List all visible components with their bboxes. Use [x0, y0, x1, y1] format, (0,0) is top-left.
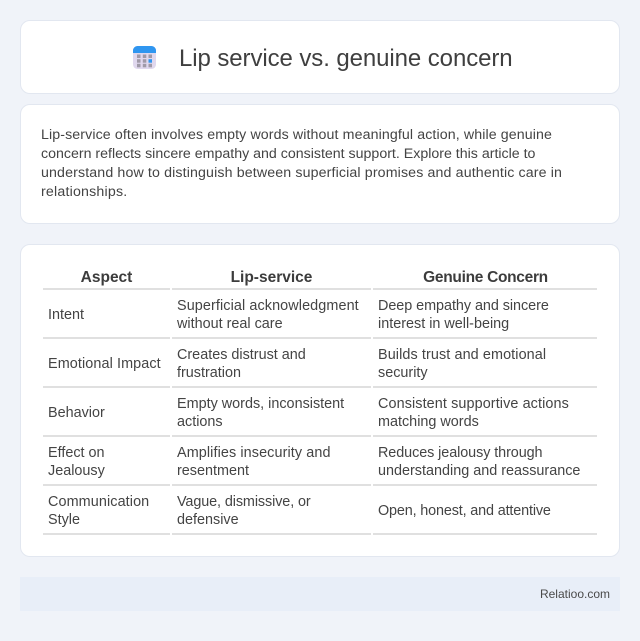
row: Intent [48, 298, 549, 332]
footer credit: Relatioo.com [540, 587, 610, 601]
intro text: Lip-service often involves empty words without meaningful action, while genuine [41, 127, 552, 143]
row: Effect on Jealousy: Amplifies insecurity and [177, 445, 331, 461]
row: Effect on Jealousy: understanding and reassurance [378, 463, 580, 479]
row: Effect on Jealousy: Jealousy [48, 463, 105, 479]
icon: calendar [133, 46, 156, 69]
intro text: relationships. [41, 184, 127, 200]
row: Intent: interest in well-being [378, 316, 509, 332]
intro text: concern reflects sincere empathy and consistent support. Explore this article to [41, 146, 535, 162]
row: Emotional Impact: Emotional Impact [48, 356, 161, 372]
row: Emotional Impact: Builds trust and emotional [378, 347, 546, 363]
row: Communication Style: Vague, dismissive, or [177, 494, 311, 510]
panel: introduction [20, 104, 620, 224]
row: Effect on Jealousy: resentment [177, 463, 249, 479]
row: Effect on Jealousy: Reduces jealousy through [378, 445, 542, 461]
row: Communication Style [48, 494, 551, 528]
row: Intent: Deep empathy and sincere [378, 298, 549, 314]
comparison table [43, 269, 597, 535]
row: Behavior: actions [177, 414, 223, 430]
row: Effect on Jealousy: Effect on [48, 445, 105, 461]
row: Behavior: Behavior [48, 405, 105, 421]
row: Emotional Impact: frustration [177, 365, 241, 381]
row: Behavior: Consistent supportive actions [378, 396, 569, 412]
intro text [41, 127, 562, 200]
row: Communication Style: Style [48, 512, 80, 528]
row: Behavior [48, 396, 569, 430]
row: Effect on Jealousy [48, 445, 580, 479]
row: Intent: Superficial acknowledgment [177, 298, 359, 314]
row: Emotional Impact: security [378, 365, 428, 381]
row: Communication Style: Open, honest, and attentive [378, 503, 551, 519]
intro text: understand how to distinguish between superficial promises and authentic care in [41, 165, 562, 181]
row: Emotional Impact: Creates distrust and [177, 347, 306, 363]
panel: comparison table [20, 244, 620, 557]
column header: Genuine Concern: Genuine Concern [423, 269, 548, 286]
footer bar [20, 577, 620, 611]
panel: title card [20, 20, 620, 94]
column header: Lip-service: Lip-service [231, 269, 312, 286]
row: Emotional Impact [48, 347, 546, 381]
row: Intent: Intent [48, 307, 84, 323]
row: Communication Style: defensive [177, 512, 239, 528]
row: Intent: without real care [177, 316, 283, 332]
title: Lip service vs. genuine concern [179, 45, 513, 72]
column header: Aspect: Aspect [81, 269, 132, 286]
row: Behavior: matching words [378, 414, 479, 430]
row: Communication Style: Communication [48, 494, 149, 510]
row: Behavior: Empty words, inconsistent [177, 396, 344, 412]
